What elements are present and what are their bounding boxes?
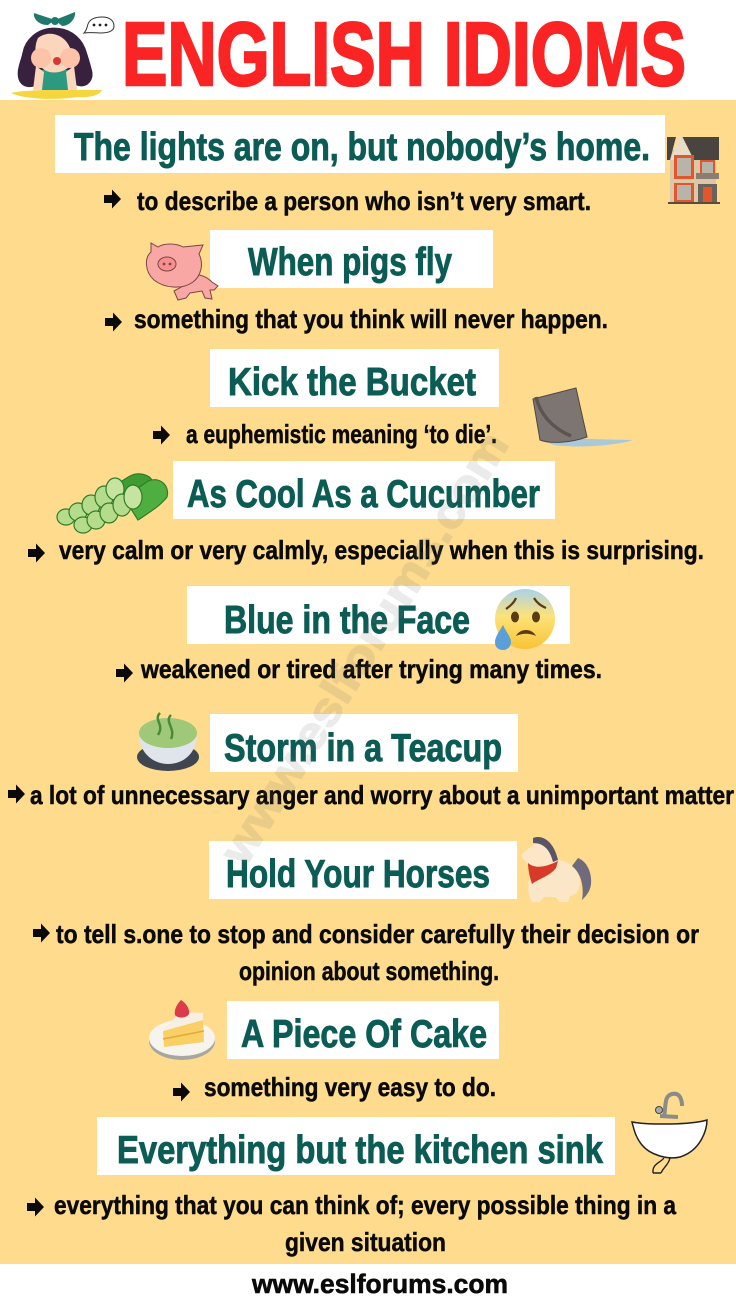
icon: anxious face [495,589,555,650]
idiom 5 [116,586,602,684]
watermark: www.eslforums.com [209,422,518,874]
heading box [173,461,555,519]
definition arrow [28,544,45,562]
definition: something that you think will never happen. [134,304,608,334]
definition arrow [33,924,50,942]
definition: to describe a person who isn’t very smart. [137,186,591,216]
heading box [97,1117,615,1175]
icon: girl with speech bubble [11,12,114,99]
heading box [55,115,665,173]
heading: A Piece Of Cake [241,1013,487,1056]
idiom 8 [149,1000,499,1102]
heading box [187,586,570,644]
idiom 2 [105,230,608,334]
heading box [210,714,518,772]
idiom 9 [27,1094,707,1257]
definition arrow [8,784,25,804]
definition line 2: given situation [285,1227,446,1257]
definition arrow [105,312,122,332]
definition arrow [153,426,170,444]
heading box [210,349,499,407]
heading box [210,230,493,288]
icon: cucumber [57,474,168,533]
icon: spilled bucket [533,388,632,447]
footer url: www.eslforums.com [251,1269,508,1299]
heading: As Cool As a Cucumber [187,473,540,516]
icon: horse [521,837,591,902]
heading: Hold Your Horses [226,853,490,896]
definition line 2: opinion about something. [239,956,499,986]
idiom 1 [55,115,720,216]
icon: house [667,134,720,204]
definition arrow [116,664,133,682]
icon: cake slice [149,1000,215,1060]
heading: Everything but the kitchen sink [117,1129,603,1172]
heading: Blue in the Face [224,599,470,642]
definition arrow [27,1198,44,1216]
heading: Storm in a Teacup [224,727,502,770]
heading: When pigs fly [248,241,452,284]
heading box [209,841,517,899]
definition: something very easy to do. [204,1072,496,1102]
idiom 4 [28,461,704,565]
definition arrow [104,190,121,208]
icon: pig [146,243,218,300]
idiom 3 [153,349,632,449]
icon: teacup [137,713,199,771]
definition arrow [173,1082,190,1102]
icon: sink [632,1094,707,1173]
heading: Kick the Bucket [228,361,476,404]
definition: weakened or tired after trying many times. [140,654,602,684]
idiom 6 [8,713,734,810]
idiom 7 [33,837,699,986]
definition: a euphemistic meaning ‘to die’. [186,419,497,449]
heading box [227,1001,499,1059]
